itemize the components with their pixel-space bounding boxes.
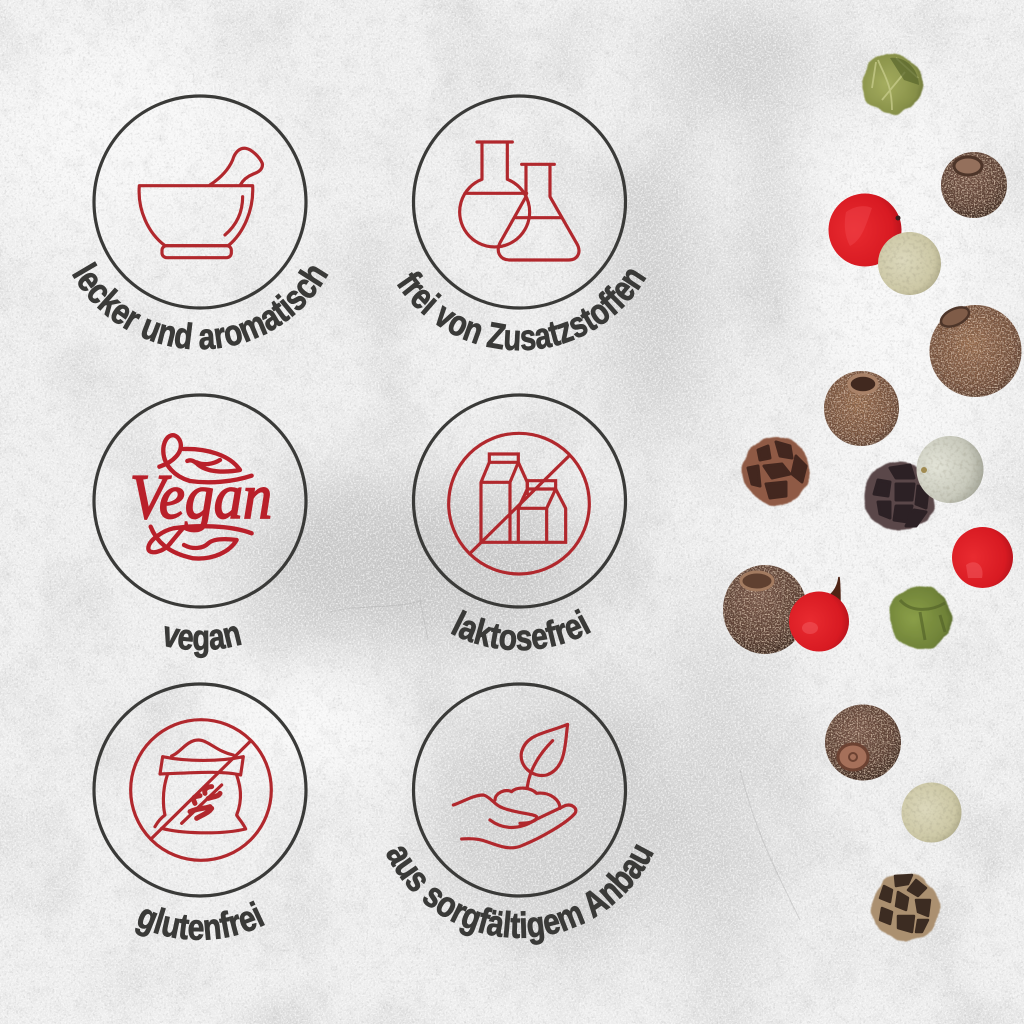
badge: glutenfrei <box>92 682 308 940</box>
badge ring <box>94 395 306 607</box>
peppercorn: big red <box>828 194 902 266</box>
badge ring <box>414 684 626 896</box>
peppercorn: brown lower <box>825 704 901 780</box>
icon: vegan lettering with leaves <box>130 435 272 559</box>
label: glutenfrei: glutenfrei <box>135 900 265 940</box>
peppercorn: green top <box>862 53 922 114</box>
badge: aus sorgfaeltigem Anbau <box>386 682 654 945</box>
badge: vegan <box>92 393 308 658</box>
icon: laboratory flasks <box>460 142 579 260</box>
icon: crossed out milk cartons <box>449 433 589 574</box>
label: aus sorgfaeltigem Anbau: aus sorgfältigem Anbau <box>386 844 654 945</box>
peppercorn: dark brown upper <box>941 152 1007 218</box>
peppercorn: large brown right <box>930 303 1022 397</box>
label: frei von Zusatzstoffen: frei von Zusatzstoffen <box>396 269 646 351</box>
badge: laktosefrei <box>412 393 628 651</box>
badge: lecker und aromatisch <box>72 94 328 350</box>
icon: vegan lettering with leaves: Vegan <box>130 461 272 532</box>
badge ring <box>414 395 626 607</box>
badge ring <box>94 684 306 896</box>
label: vegan: vegan <box>164 626 242 658</box>
peppercorn: wrinkled dark <box>864 462 934 532</box>
peppercorn: wrinkled reddish <box>742 437 810 504</box>
peppercorn: red right <box>952 527 1013 588</box>
label: lecker und aromatisch: lecker und aromatisch <box>72 261 328 350</box>
badge: frei von Zusatzstoffen <box>396 94 646 351</box>
icon: crossed out flour sack <box>131 720 271 860</box>
icon: mortar and pestle <box>139 148 262 258</box>
peppercorn: pale lower <box>902 782 962 842</box>
peppercorn: red with stem <box>789 577 849 652</box>
peppercorn: brown middle <box>824 371 899 446</box>
peppercorn: grey white <box>916 436 984 503</box>
peppercorn: green lower <box>888 586 952 649</box>
badge ring <box>94 96 306 308</box>
peppercorns column <box>723 53 1022 941</box>
badge ring <box>414 96 626 308</box>
label: laktosefrei: laktosefrei <box>450 608 592 651</box>
icon: hand with seedling <box>453 724 576 848</box>
peppercorn: pale upper <box>878 232 941 295</box>
peppercorn: large brown left <box>723 565 807 654</box>
peppercorn: wrinkled bottom <box>871 873 939 941</box>
